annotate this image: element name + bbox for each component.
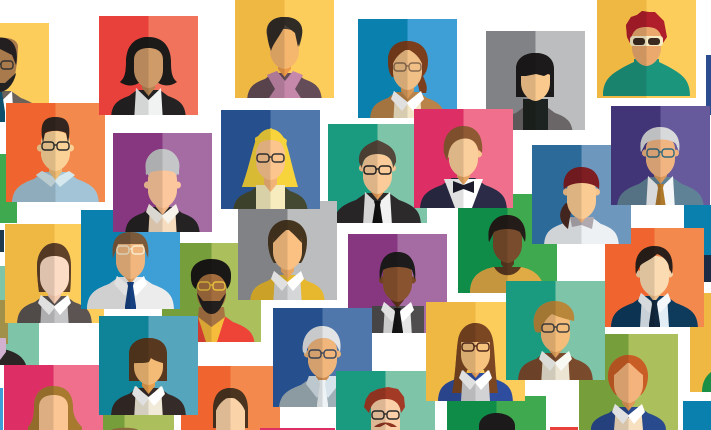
panel: green tile at bottom — [447, 396, 546, 430]
portrait: man in green turtleneck with sunglasses — [603, 11, 690, 96]
panel: teal tile, man with black glasses — [328, 124, 427, 223]
panel: yellow tile, top centre woman — [235, 0, 334, 105]
portrait: man with dark hair and navy tie — [611, 246, 698, 334]
panel: orange tile, man with glasses — [6, 103, 105, 206]
panel: dark fragment at left edge — [0, 230, 4, 252]
portrait: top of black hair — [479, 413, 515, 430]
portrait: gray haired man in gray sweater — [279, 326, 366, 414]
panel: gray tile, woman in turtleneck — [486, 31, 585, 139]
panel: green tile, woman with braids — [458, 194, 557, 293]
panel: red tile, woman in black jacket — [99, 16, 198, 122]
panel: navy tile, blonde woman — [221, 110, 320, 217]
panel: orange tile, bottom woman — [181, 366, 280, 430]
panel: gray tile, woman in yellow cardigan — [238, 201, 337, 307]
panel: pink tile, bottom left woman — [4, 365, 103, 430]
portrait: man with yellow glasses — [190, 259, 254, 342]
panel: olive tile at bottom — [75, 415, 174, 430]
panel: pink tile, man in bow tie — [414, 109, 513, 212]
portrait: woman with auburn hair and glasses — [370, 41, 442, 118]
panel: yellow tile, far left man — [0, 23, 49, 125]
panel: pink fragment at bottom — [260, 428, 335, 430]
panel: blue tile at right edge — [684, 205, 711, 282]
panel: indigo tile, gray haired man — [611, 106, 710, 205]
portrait: person with glasses in brown jacket — [518, 301, 593, 386]
panel: dark fragment of suit at right edge — [704, 255, 711, 282]
panel: green tile at left edge — [0, 154, 17, 223]
panel: yellow tile, woman in gray jacket — [5, 224, 104, 330]
portrait: top of hidden head — [111, 428, 138, 430]
portrait: man in black suit — [337, 140, 421, 223]
panel: teal tile fragment at lower left — [0, 266, 39, 365]
panel: blue tile, woman with ponytail — [358, 19, 457, 126]
panel: teal tile, person with brown swept hair — [506, 281, 605, 386]
portrait: bearded man — [0, 38, 32, 122]
panel: purple tile, man with dark skin — [348, 234, 447, 342]
portrait: woman with black bob — [513, 53, 572, 130]
panel: red fragment at bottom — [550, 427, 578, 430]
panel: green fragment on right yellow tile — [702, 372, 711, 392]
panel: yellow tile at right edge — [690, 293, 711, 392]
panel: teal tile, man with red hair and moustache — [336, 371, 435, 430]
panel: yellow tile, man with red hair — [597, 0, 696, 98]
panel: navy tile, gray haired man with glasses — [273, 308, 372, 414]
panel: blue fragment at bottom left — [0, 388, 3, 430]
portrait: woman with dark hair — [250, 220, 325, 307]
portrait: red haired man with glasses — [364, 387, 405, 430]
portrait: woman with red hair and navy jacket — [591, 355, 666, 430]
portrait: man with pale glasses and navy tie — [87, 232, 174, 316]
panel: yellow tile, woman with long brown hair — [426, 302, 525, 405]
panel: orange tile, man in navy suit — [605, 228, 704, 334]
portrait: woman with braided hair — [470, 215, 546, 293]
portrait: woman with bangs and white collar — [111, 338, 186, 420]
panel: blue tile fragment at bottom right — [683, 401, 711, 430]
panel: purple tile, gray haired woman — [113, 133, 212, 239]
portrait: woman with brown hair — [17, 243, 92, 330]
portrait: woman with long brown hair and glasses — [438, 323, 513, 405]
portrait: man in vest and black tie — [372, 252, 424, 342]
portrait: gray haired man in blue suit — [617, 127, 704, 218]
portrait: man in tuxedo with bow tie — [420, 126, 507, 212]
portrait: woman with maroon hair — [544, 167, 619, 250]
portrait: woman with wavy golden hair — [28, 386, 82, 430]
panel: olive tile, woman with red hair — [579, 334, 678, 430]
portrait: man in blue sweater — [12, 117, 99, 206]
portrait: gray haired woman in black jacket — [125, 149, 200, 239]
portrait: partly hidden person — [0, 300, 26, 365]
panel: navy fragment at right edge — [706, 55, 711, 115]
portrait: woman with parted dark hair — [213, 388, 248, 430]
panel: teal tile, woman in black jacket — [99, 316, 198, 420]
portrait: blonde woman with glasses — [234, 128, 308, 209]
panel: steel blue tile, woman with ponytail — [532, 145, 631, 250]
portrait: woman with short dark hair — [247, 17, 322, 105]
portrait: woman with flared black hair — [111, 37, 186, 122]
panel: blue tile, man in white shirt — [81, 210, 180, 316]
panel: olive tile, man with beard — [162, 243, 261, 349]
